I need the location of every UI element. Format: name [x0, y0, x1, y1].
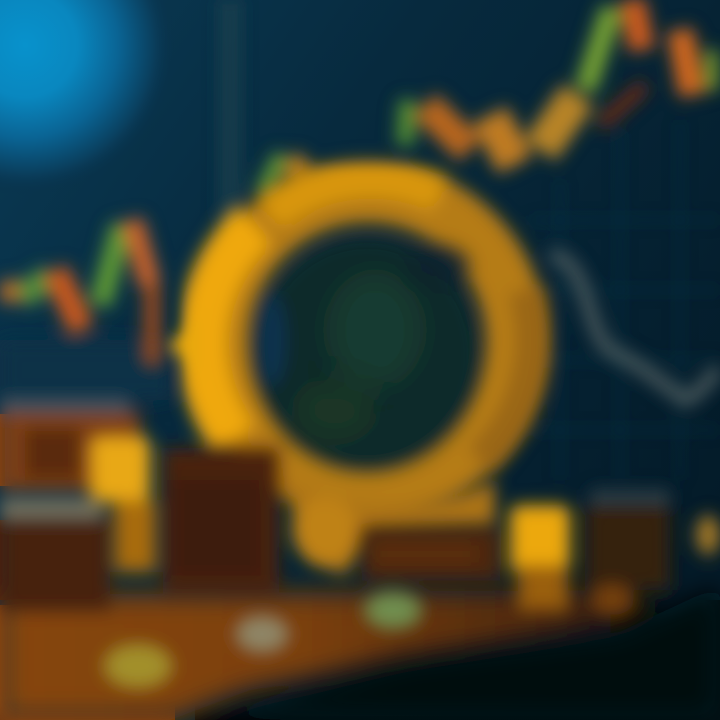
blue glow: [0, 0, 230, 230]
bottom shadow: [190, 585, 720, 720]
edge underlay: left stacks and table: [0, 414, 720, 720]
gold coin ring: [170, 179, 533, 488]
gold coin stack: left: [90, 436, 156, 572]
coin stack: left top: [0, 398, 140, 490]
grey trend line: [550, 255, 720, 400]
coin stack: far right: [585, 490, 720, 615]
coin stack: left bottom: [0, 498, 110, 610]
chart grid: [230, 0, 720, 480]
candlestick chart: top right: [262, 0, 712, 195]
coin centre: [255, 238, 479, 472]
coin stack: centre: [163, 448, 279, 593]
gold blob: lower centre: [293, 496, 357, 564]
coin stack: mid right: [362, 528, 500, 580]
table surface: [0, 590, 660, 720]
table reflections: [104, 592, 421, 688]
candlestick chart: left: [0, 220, 152, 365]
coin base glow: [285, 480, 495, 575]
dark band behind left stacks: [0, 340, 170, 400]
gold coin stack: right: [510, 505, 570, 610]
